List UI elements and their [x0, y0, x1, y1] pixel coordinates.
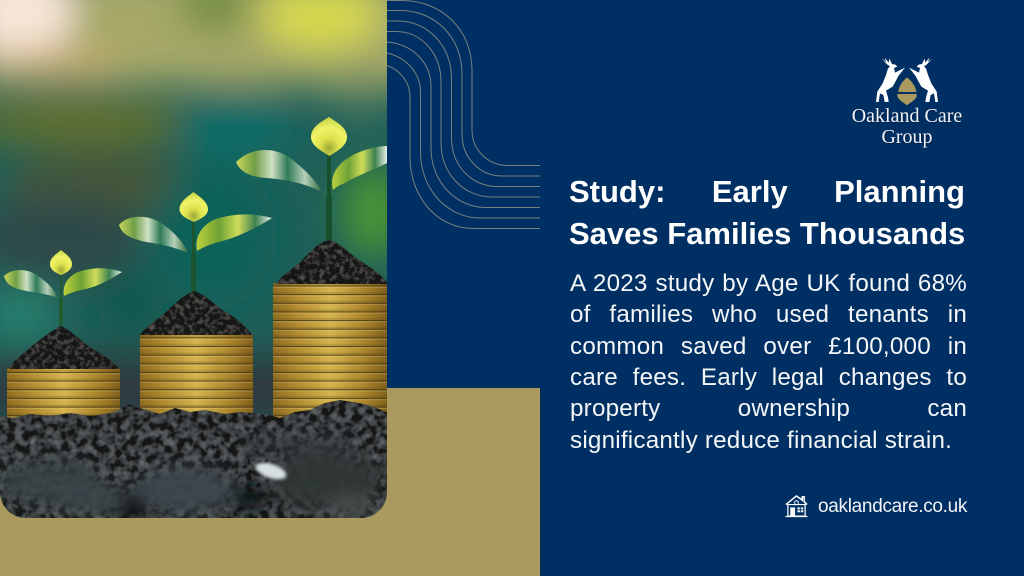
soil mound 2: [140, 291, 252, 335]
photo: coins and seedlings: [0, 0, 387, 518]
body text: [570, 270, 967, 454]
soil mound 3: [276, 240, 388, 284]
icon: house: [785, 495, 808, 518]
coin stack 2: [140, 334, 253, 420]
logo wordmark: Oakland Care: [852, 105, 962, 127]
photo background: [0, 0, 420, 518]
body text: of families who used tenants in: [570, 301, 967, 328]
logo: [852, 58, 962, 148]
logo wordmark: Group: [881, 126, 933, 148]
website link: [785, 495, 968, 518]
seedling 3: [236, 117, 387, 240]
body text: significantly reduce financial strain.: [570, 427, 952, 454]
heading: Study: Early Planning: [569, 174, 965, 209]
foreground soil: [0, 400, 387, 520]
seedling 1: [4, 250, 122, 326]
decorative concentric curves: [387, 0, 540, 229]
heading: [569, 174, 965, 251]
coin stack 3: [273, 283, 387, 420]
soil mound 1: [9, 326, 119, 369]
body text: care fees. Early legal changes to: [570, 364, 967, 391]
seedling 2: [119, 192, 272, 291]
body text: A 2023 study by Age UK found 68%: [570, 270, 967, 297]
logo wordmark: [852, 105, 962, 148]
body text: property ownership can: [570, 395, 967, 422]
icon: stags and acorn: [876, 58, 938, 106]
body text: common saved over £100,000 in: [570, 333, 967, 360]
coin stack 1: [7, 368, 120, 420]
heading: Saves Families Thousands: [569, 216, 965, 251]
website text: oaklandcare.co.uk: [818, 496, 967, 517]
gold block: [0, 388, 540, 576]
